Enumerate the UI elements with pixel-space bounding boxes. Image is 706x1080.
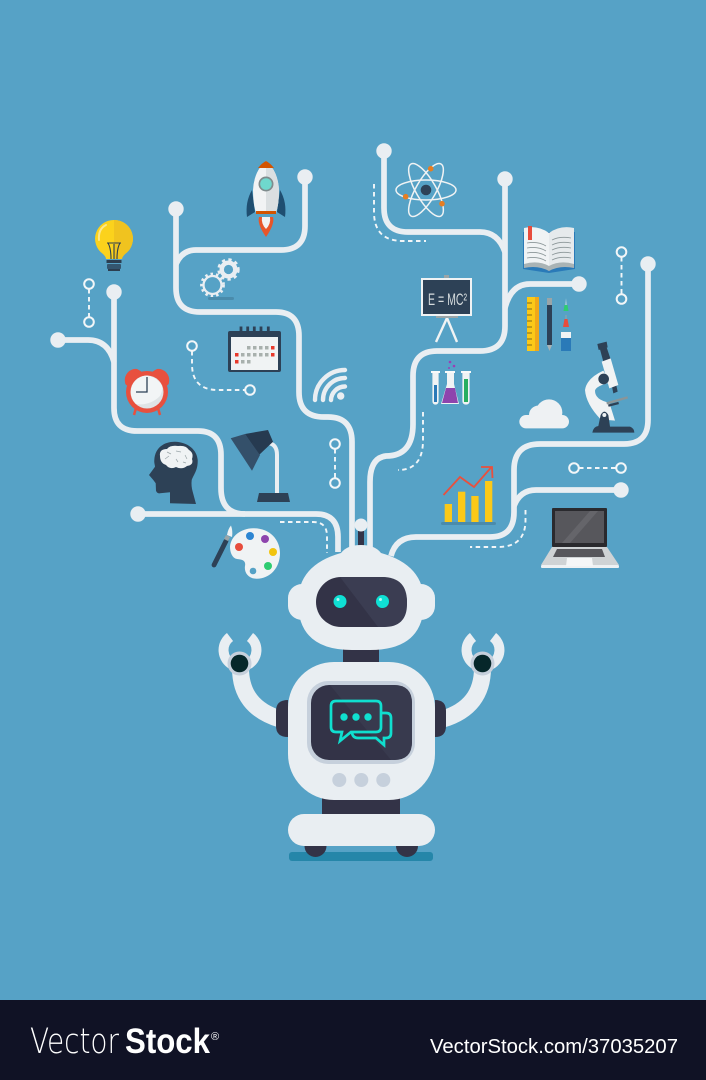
icon: chalkboard E=MC2: E = MC² [428,290,467,309]
head [288,545,435,650]
icon: calendar [228,326,281,372]
face [316,577,407,627]
footer band [0,1000,706,1080]
icon: gears [202,260,238,300]
icon: ruler, pen and stationery [527,297,571,351]
icon: light bulb [95,220,133,271]
circuit traces [50,143,656,556]
wheels [304,835,418,857]
left arm [224,637,288,737]
icon: desk lamp [231,430,290,502]
antenna [354,518,368,547]
right arm [435,637,499,737]
icon: atom [396,159,456,221]
chest screen [307,681,415,764]
body [288,662,435,800]
icon: test tubes and flask [431,361,471,404]
icon: growth chart [441,467,496,525]
icon: cloud [519,399,569,428]
icon: laptop [541,508,619,568]
icon: wifi [315,370,345,400]
icon: head with brain [149,442,198,504]
base [288,814,435,846]
footer url: VectorStock.com/37035207 [430,1036,678,1058]
dashed connectors [84,184,626,553]
footer logo: Vector [30,1022,119,1062]
eyes [334,595,389,608]
icon: alarm clock [125,369,169,415]
footer logo [30,1022,219,1062]
icon: chalkboard E=MC2 [421,275,472,342]
waist [322,798,400,818]
neck [343,648,379,665]
robot [224,518,499,861]
chat icon [331,701,391,745]
icon: microscope [585,342,634,433]
footer logo: ® [211,1031,219,1043]
icon: paint palette [214,526,280,579]
shadow [289,852,433,861]
icon: rocket [247,161,285,237]
footer logo: Stock [125,1022,210,1061]
icon: open book [523,226,575,273]
buttons [332,773,390,787]
